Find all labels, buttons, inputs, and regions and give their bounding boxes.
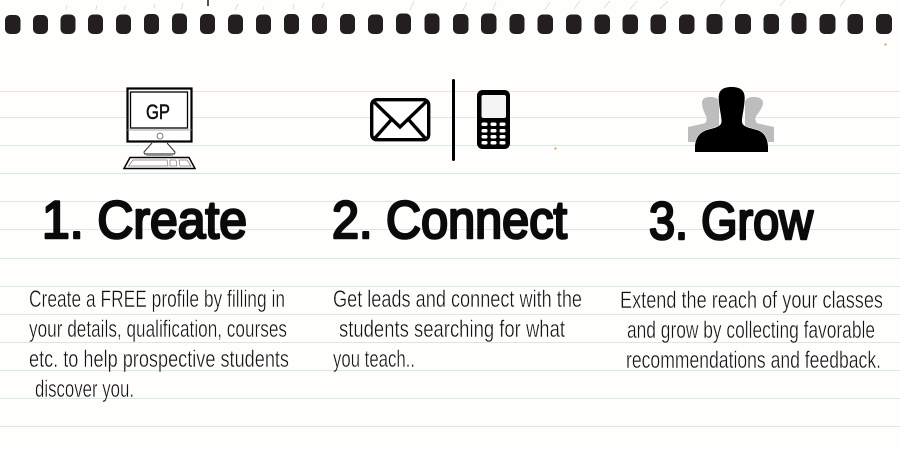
column 2: connect (332, 79, 582, 373)
text block: connect description: Get leads and connect with the (333, 286, 582, 313)
column 1: create (29, 88, 289, 403)
column 3: grow (620, 87, 883, 374)
heading: 2. Connect: 2. Connect (332, 191, 567, 250)
text block: create description: Create a FREE profile by filling in (29, 286, 285, 313)
text block: create description: discover you. (35, 376, 134, 403)
icon: desktop computer with GP on screen (124, 88, 195, 168)
icon: mobile phone (477, 90, 510, 149)
text block: create description: etc. to help prospective students (29, 346, 289, 373)
text block: create description (29, 286, 289, 403)
heading: 1. Create: 1. Create (42, 191, 247, 250)
text block: connect description (333, 286, 582, 373)
heading: 3. Grow: 3. Grow (649, 192, 814, 251)
divider bar (452, 79, 455, 161)
icon: desktop computer with GP on screen: GP (146, 101, 170, 124)
icon: envelope (372, 100, 429, 140)
text block: create description: your details, qualification, courses (29, 316, 287, 343)
text block: connect description: you teach.. (333, 346, 415, 373)
text block: connect description: students searching for what (339, 316, 565, 343)
binder punch holes (5, 13, 892, 34)
icon: group of people silhouettes (688, 87, 774, 152)
text block: grow description (620, 287, 883, 374)
